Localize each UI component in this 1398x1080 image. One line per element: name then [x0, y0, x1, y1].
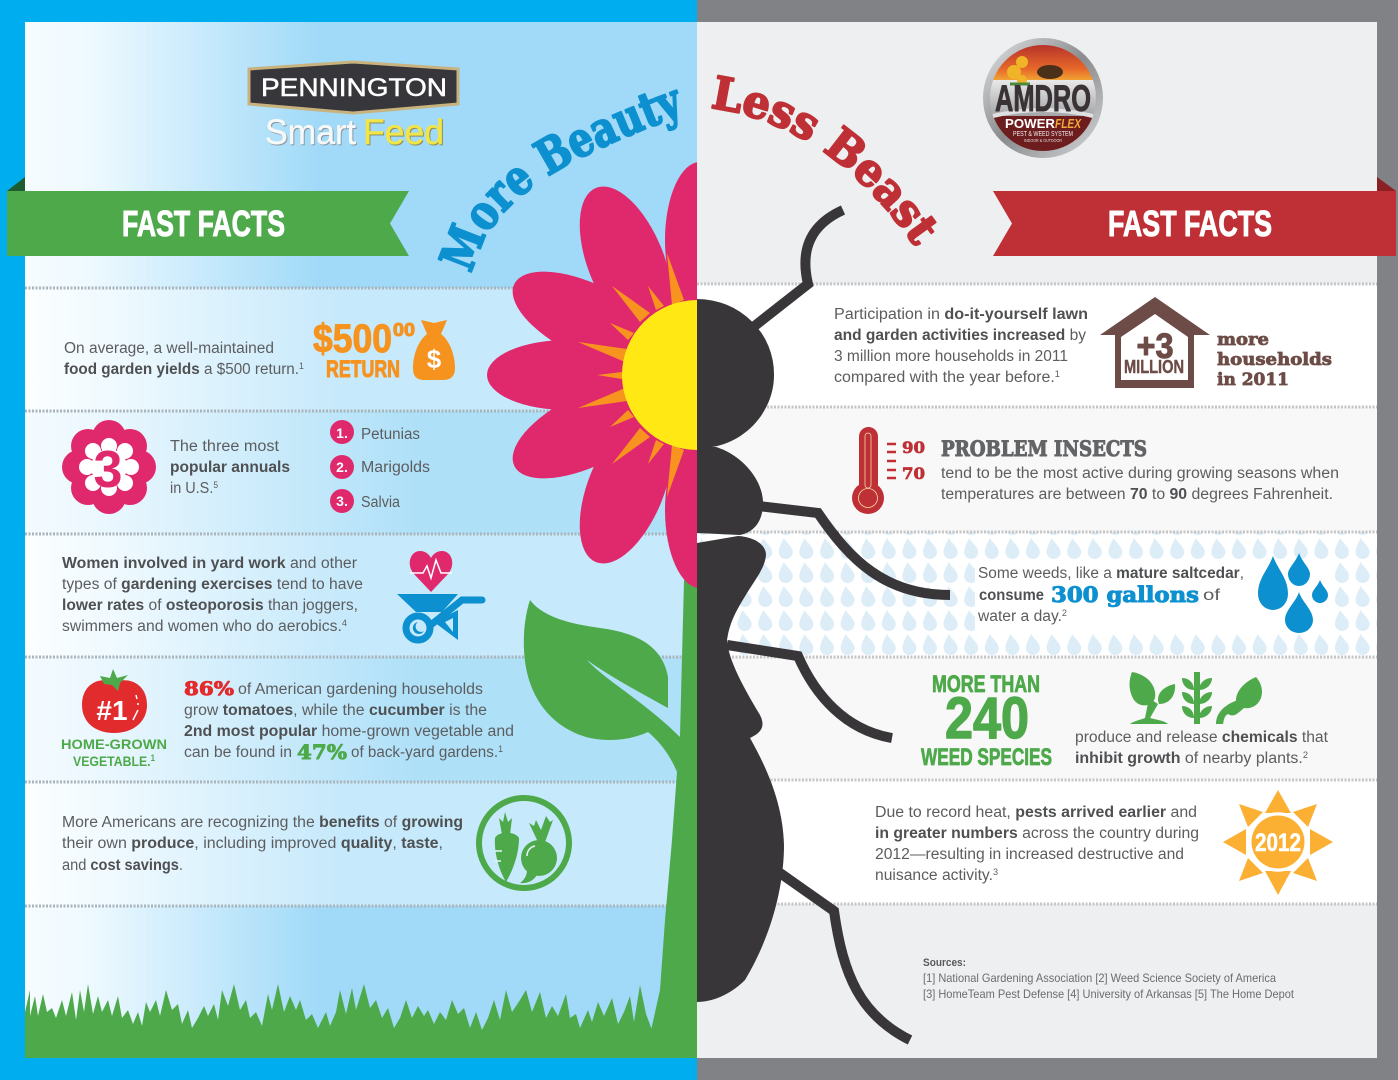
- fact: popular annuals: popular annuals: [170, 459, 290, 476]
- sources: Sources:: [923, 957, 966, 969]
- icon: tomato #1: #1: [96, 695, 128, 726]
- fact: saltcedar water use: 2: [1062, 608, 1067, 618]
- banner: red fast facts: [993, 177, 1396, 256]
- sources: [1] National Gardening Association [2] Weed Science Society of America: [923, 971, 1276, 985]
- fact: record heat pests: [875, 790, 1333, 895]
- icon: sun 2012: [1223, 790, 1333, 895]
- fact: benefits of growing produce: their own produce, including improved quality, taste,: [62, 835, 443, 852]
- fact: do-it-yourself households: [834, 297, 1332, 390]
- fact: osteoporosis: swimmers and women who do aerobics.: [62, 618, 338, 635]
- stat: $500 return: [313, 317, 415, 383]
- fact: osteoporosis: 4: [342, 618, 347, 628]
- logo: Amdro PowerFlex: INDOOR & OUTDOOR: [1024, 138, 1063, 143]
- ant head: [697, 299, 774, 449]
- fact: food garden return: 1: [299, 361, 304, 371]
- ant leg lower: [780, 873, 910, 1040]
- fact: 240 weed species: produce and release chemicals that: [1075, 729, 1329, 746]
- icon: heart with pulse: [410, 551, 452, 592]
- fact: do-it-yourself households: Participation in do-it-yourself lawn: [834, 306, 1088, 323]
- fact: saltcedar water use: water a day.: [978, 608, 1061, 625]
- logo: Pennington Smart Feed: Smart: [265, 113, 356, 152]
- fact: benefits of growing produce: and cost savings.: [62, 857, 183, 874]
- flower: pink petals and orange star: [487, 162, 697, 588]
- icon: three plants: [1130, 672, 1262, 724]
- ant silhouette: [697, 210, 950, 1040]
- grass: [25, 984, 697, 1058]
- logo: Pennington Smart Feed: Feed: [363, 113, 444, 152]
- icon: house +3 million: +3: [1136, 327, 1174, 366]
- list: top three annuals: Petunias: [361, 426, 420, 443]
- fact: food garden return: [64, 317, 455, 383]
- stat: more than 240 weed species: [921, 671, 1052, 771]
- logo: Pennington Smart Feed: [249, 62, 458, 152]
- fact: saltcedar water use: of: [1203, 587, 1221, 604]
- icon: house +3 million: MILLION: [1124, 357, 1184, 377]
- icon: flower with 3: [62, 420, 156, 514]
- list: top three annuals: 1.: [336, 425, 348, 441]
- label: more households in 2011: more: [1217, 330, 1269, 350]
- list: top three annuals: 3.: [336, 493, 348, 509]
- fact: record heat pests: Due to record heat, pests arrived earlier and: [875, 804, 1197, 821]
- list: top three annuals: Marigolds: [361, 459, 430, 476]
- fact: saltcedar water use: consume: [979, 587, 1044, 604]
- fact: popular annuals: 5: [213, 480, 218, 490]
- icon: wheelbarrow: [397, 594, 482, 640]
- fact: record heat pests: 3: [993, 867, 998, 877]
- label: more households in 2011: [1217, 330, 1332, 390]
- label: home-grown vegetable: VEGETABLE.: [73, 753, 161, 769]
- ant midsection: [697, 536, 784, 1002]
- fact: do-it-yourself households: 1: [1055, 369, 1060, 379]
- fact: food garden return: On average, a well-maintained: [64, 340, 274, 357]
- stat: more than 240 weed species: 240: [945, 686, 1029, 751]
- label: home-grown vegetable: [61, 736, 167, 769]
- panel: left background: [0, 0, 697, 1080]
- panel: right background: [697, 0, 1398, 1080]
- fact: problem insects: [852, 427, 1339, 514]
- logo: Amdro PowerFlex: FLEX: [1055, 116, 1082, 131]
- fact: osteoporosis: types of gardening exercises tend to have: [62, 576, 363, 593]
- icon: money bag: $: [427, 344, 442, 374]
- logo: Amdro PowerFlex: [983, 38, 1103, 158]
- fact: record heat pests: 2012—resulting in increased destructive and: [875, 846, 1184, 863]
- fact: 240 weed species: 2: [1303, 750, 1308, 760]
- list: top three annuals: Salvia: [361, 494, 400, 511]
- fact: do-it-yourself households: compared with the year before.: [834, 369, 1048, 386]
- stat: $500 return: $500: [313, 317, 392, 361]
- plant stem and leaf: [524, 580, 697, 1035]
- ant leg upper: [758, 506, 950, 595]
- ant antenna: [752, 210, 843, 328]
- fact: popular annuals: in U.S.: [170, 480, 216, 497]
- icon: sun 2012: 2012: [1255, 829, 1301, 857]
- banner: green fast facts: [7, 177, 409, 256]
- label: more households in 2011: households: [1217, 350, 1332, 370]
- ant leg middle: [727, 645, 892, 738]
- icon: flower with 3: 3: [94, 441, 122, 499]
- stat: $500 return: 00: [393, 320, 415, 340]
- icon: money bag: [413, 320, 455, 380]
- label: home-grown vegetable: HOME-GROWN: [61, 736, 167, 752]
- logo: Pennington Smart Feed: PENNINGTON: [261, 74, 447, 102]
- fact: 240 weed species: inhibit growth of nearby plants.: [1075, 750, 1299, 767]
- stat: more than 240 weed species: WEED SPECIES: [921, 744, 1052, 771]
- fact: tomatoes and cucumbers: 1: [498, 744, 503, 754]
- fact: tomatoes and cucumbers: 86%: [184, 678, 234, 700]
- fact: tomatoes and cucumbers: of American gardening households: [238, 681, 483, 698]
- fact: popular annuals: The three most: [170, 438, 280, 455]
- list: top three annuals: [330, 420, 430, 513]
- fact: tomatoes and cucumbers: [61, 669, 514, 769]
- label: more households in 2011: in 2011: [1217, 370, 1289, 390]
- fact: osteoporosis: lower rates of osteoporosis than joggers,: [62, 597, 358, 614]
- fact: problem insects: PROBLEM INSECTS: [941, 436, 1147, 461]
- label: home-grown vegetable: 1: [151, 753, 155, 763]
- curved title: More Beauty: More Beauty: [438, 89, 678, 273]
- stat: more than 240 weed species: MORE THAN: [932, 671, 1040, 698]
- fact: saltcedar water use: 300 gallons: [1051, 582, 1199, 607]
- sources: [923, 957, 1295, 1001]
- fact: tomatoes and cucumbers: can be found in: [184, 744, 292, 761]
- logo: Amdro PowerFlex: POWER: [1005, 116, 1056, 131]
- fact: 240 weed species: [921, 671, 1329, 771]
- curved title: Less Beast: Less Beast: [711, 74, 937, 246]
- icon: tomato #1: [82, 669, 147, 733]
- fact: osteoporosis: [62, 551, 482, 640]
- fact: record heat pests: nuisance activity.: [875, 867, 992, 884]
- banner: red fast facts: FAST FACTS: [1108, 203, 1272, 244]
- sources: [3] HomeTeam Pest Defense [4] University of Arkansas [5] The Home Depot: [923, 987, 1295, 1001]
- icon: water drops: [1258, 553, 1328, 633]
- icon: carrot and beet: [479, 798, 569, 888]
- fact: popular annuals: [62, 420, 430, 514]
- ant thorax: [697, 447, 763, 535]
- fact: do-it-yourself households: 3 million more households in 2011: [834, 348, 1068, 365]
- fact: problem insects: tend to be the most active during growing seasons when: [941, 465, 1339, 482]
- logo: Amdro PowerFlex: PEST & WEED SYSTEM: [1013, 131, 1073, 138]
- list: top three annuals: 2.: [336, 459, 348, 475]
- fact: do-it-yourself households: and garden activities increased by: [834, 327, 1086, 344]
- logo: Amdro PowerFlex: AMDRO: [995, 78, 1091, 119]
- fact: record heat pests: in greater numbers across the country during: [875, 825, 1199, 842]
- banner: green fast facts: FAST FACTS: [122, 203, 285, 244]
- icon: house +3 million: [1100, 297, 1210, 388]
- icon: thermometer: 70: [902, 464, 925, 483]
- fact: tomatoes and cucumbers: 2nd most popular home-grown vegetable and: [184, 723, 514, 740]
- fact: tomatoes and cucumbers: 47%: [297, 740, 347, 764]
- stat: $500 return: RETURN: [326, 356, 400, 383]
- fact: problem insects: temperatures are between 70 to 90 degrees Fahrenheit.: [941, 486, 1333, 503]
- fact: tomatoes and cucumbers: grow tomatoes, while the cucumber is the: [184, 702, 487, 719]
- icon: thermometer: 90: [902, 438, 925, 457]
- fact: tomatoes and cucumbers: of back-yard gardens.: [351, 744, 501, 761]
- fact: benefits of growing produce: More Americans are recognizing the benefits of growing: [62, 814, 463, 831]
- fact: osteoporosis: Women involved in yard work and other: [62, 555, 357, 572]
- fact: food garden return: food garden yields a $500 return.: [64, 361, 301, 378]
- fact: saltcedar water use: [977, 553, 1328, 633]
- icon: thermometer: [852, 427, 925, 514]
- fact: benefits of growing produce: [62, 798, 569, 888]
- fact: saltcedar water use: Some weeds, like a mature saltcedar,: [978, 565, 1244, 582]
